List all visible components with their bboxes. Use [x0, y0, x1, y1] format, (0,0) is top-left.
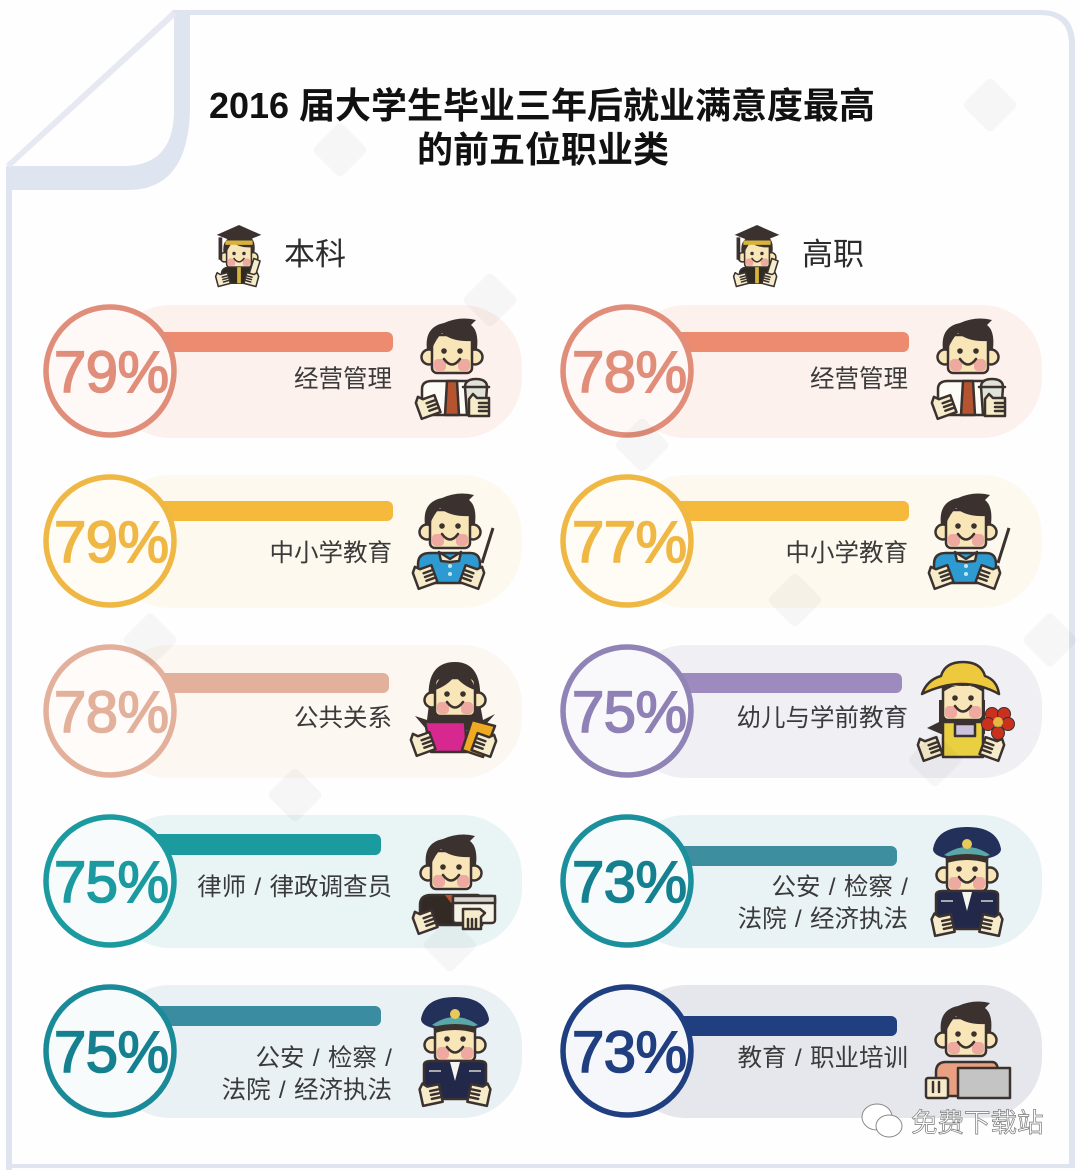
row: 高职 经营管理 78%: 经营管理	[810, 365, 908, 393]
row: 本科 公共关系 78%: 78%	[54, 680, 169, 745]
icon: teacher	[411, 494, 493, 589]
wechat watermark: 免费下载站	[911, 1108, 1044, 1138]
row: 高职 幼儿与学前教育 75%: 幼儿与学前教育	[736, 704, 908, 732]
row: 本科 经营管理 79%: 79%	[54, 340, 169, 405]
row: 高职 教育/职业培训 73%: 教育 / 职业培训	[738, 1044, 908, 1072]
row: 本科 公安 75%: 法院 / 经济执法	[222, 1076, 392, 1104]
row: 本科 公共关系 78%	[46, 645, 522, 778]
row: 高职 中小学教育 77%: 77%	[572, 510, 687, 575]
icon: lawyer	[411, 835, 495, 934]
row: 本科 律师 75%	[46, 815, 522, 948]
row: 高职 幼儿与学前教育 75%: 75%	[572, 680, 687, 745]
icon: manager	[930, 319, 1005, 419]
row: 高职 公安 73%: 73%	[572, 850, 687, 915]
row: 本科 中小学教育 79%: 79%	[54, 510, 169, 575]
title: 的前五位职业类	[417, 129, 669, 170]
row: 本科 公安 75%: 75%	[54, 1020, 169, 1085]
row: 本科 中小学教育 79%	[46, 475, 522, 608]
row: 高职 教育/职业培训 73%: 73%	[572, 1020, 687, 1085]
column heading: 本科: 本科	[284, 237, 346, 272]
column heading: 本科	[215, 225, 346, 287]
title: 2016 届大学生毕业三年后就业满意度最高	[209, 85, 875, 126]
column heading: 高职: 高职	[802, 237, 864, 272]
icon: woman with folder	[409, 662, 498, 757]
row: 本科 律师 75%: 75%	[54, 850, 169, 915]
icon: kindergarten teacher with flower	[916, 662, 1014, 761]
icon: manager	[414, 319, 489, 419]
row: 高职 公安 73%: 法院 / 经济执法	[738, 905, 908, 933]
row: 本科 经营管理 79%	[46, 305, 522, 438]
row: 本科 公安 75%: 公安 / 检察 /	[255, 1044, 392, 1072]
row: 高职 经营管理 78%: 78%	[572, 340, 687, 405]
row: 高职 公安 73%	[563, 815, 1042, 948]
row: 本科 律师 75%: 律师 / 律政调查员	[197, 873, 392, 901]
wechat watermark	[862, 1104, 1044, 1138]
icon: graduate	[733, 225, 779, 287]
icon: police officer	[419, 997, 491, 1106]
icon: trainer with laptop	[926, 1002, 1010, 1098]
icon: teacher	[927, 494, 1009, 589]
row: 高职 经营管理 78%	[563, 305, 1042, 438]
row: 高职 教育/职业培训 73%	[563, 985, 1042, 1118]
icon: police officer	[931, 827, 1003, 936]
title	[209, 85, 875, 170]
row: 高职 中小学教育 77%: 中小学教育	[786, 539, 908, 567]
row: 本科 中小学教育 79%: 中小学教育	[270, 539, 392, 567]
row: 高职 中小学教育 77%	[563, 475, 1042, 608]
icon: graduate	[215, 225, 261, 287]
watermarks	[122, 77, 1078, 973]
row: 本科 经营管理 79%: 经营管理	[294, 365, 392, 393]
row: 高职 公安 73%: 公安 / 检察 /	[771, 873, 908, 901]
column heading: 高职	[733, 225, 864, 287]
icon: wechat bubbles	[862, 1104, 902, 1137]
row: 本科 公安 75%	[46, 985, 522, 1118]
row: 高职 幼儿与学前教育 75%	[563, 645, 1042, 778]
row: 本科 公共关系 78%: 公共关系	[294, 704, 392, 732]
